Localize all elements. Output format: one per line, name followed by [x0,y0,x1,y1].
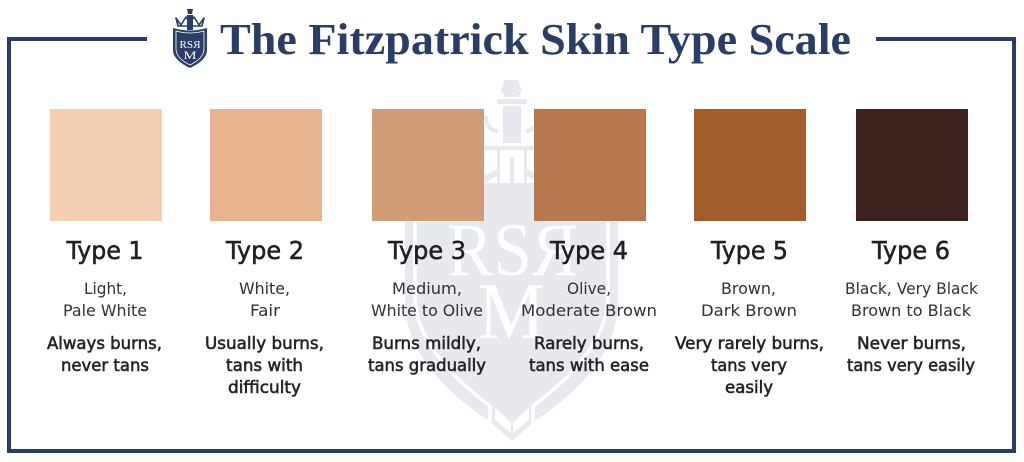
panel: type 4: tans with ease [529,356,649,375]
panel: type 3: tans gradually [368,356,486,375]
panel: type 5: tans very [711,356,787,375]
logo crest [173,9,207,68]
panel: type 2: Fair [250,301,280,320]
panel: type 1: Type 1 [66,236,144,265]
panel: type 2 [205,109,324,397]
panel: type 3: Type 3 [387,236,466,265]
panel: type 2: Usually burns, [205,334,324,353]
panel: type 2: White, [239,279,290,298]
panel: type 6: Type 6 [871,236,950,265]
panel: type 3: Burns mildly, [372,334,481,353]
panel: type 6: tans very easily [847,356,975,375]
panel: type 5: Dark Brown [701,301,797,320]
panel: type 1: Light, [84,279,127,298]
panel: type 2: Type 2 [225,236,304,265]
panel: type 5 [675,109,824,397]
panel: type 3: White to Olive [371,301,483,320]
panel: type 5: Very rarely burns, [675,334,824,353]
panel: type 3: Medium, [392,279,462,298]
panel: type 1: Always burns, [47,334,162,353]
watermark shield [405,80,618,441]
logo crest: RSЯ [180,40,200,51]
watermark shield: M [478,268,545,356]
panel: type 6: Brown to Black [851,301,972,320]
panel: type 5: Brown, [721,279,776,298]
logo crest: M [184,48,197,62]
panel: type 6: Black, Very Black [845,279,979,298]
panel: type 6: Never burns, [857,334,966,353]
panel: type 4: Olive, [567,279,611,298]
panel: type 1: never tans [61,356,149,375]
panel: type 2: difficulty [228,378,301,397]
panel: type 5: Type 5 [710,236,788,265]
panel: type 1: Pale White [63,301,147,320]
panel: type 3 [368,109,486,375]
watermark shield: RSЯ [447,209,578,292]
panel: type 6 [845,109,979,375]
title: The Fitzpatrick Skin Type Scale [220,15,851,64]
panel: type 4: Moderate Brown [521,301,657,320]
panel: type 4: Rarely burns, [534,334,644,353]
panel: type 2: tans with [226,356,303,375]
panel: type 5: easily [725,378,773,397]
panel: type 4 [521,109,657,375]
panel: type 1 [47,109,162,375]
panel: type 4: Type 4 [549,236,628,265]
